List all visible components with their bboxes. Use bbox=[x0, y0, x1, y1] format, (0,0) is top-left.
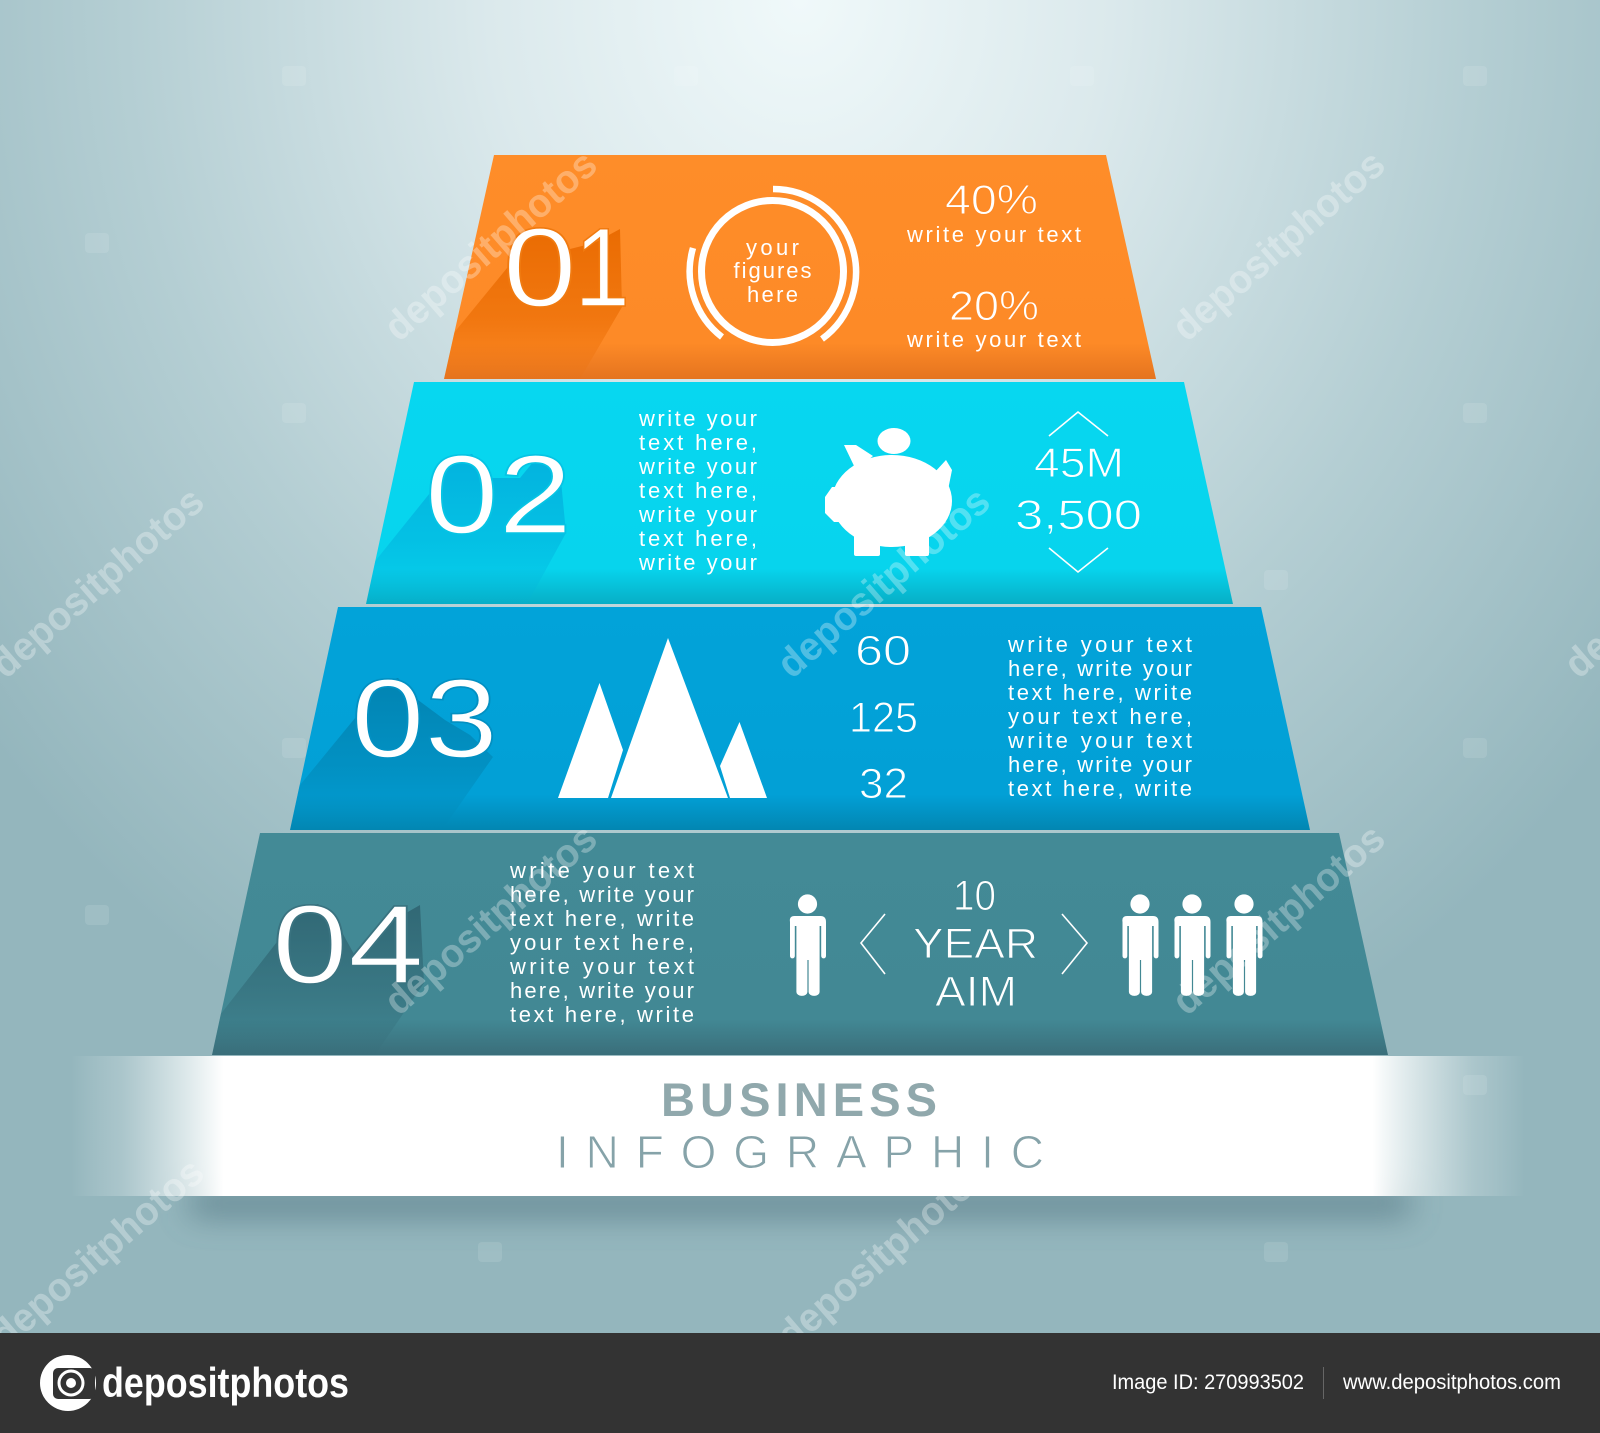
icon: piggy bank bbox=[825, 428, 952, 556]
number 01: 1 bbox=[574, 205, 630, 330]
text block 04: text here, write bbox=[510, 1002, 694, 1027]
footer background bbox=[0, 1333, 1600, 1433]
diagonal depositphotos watermarks: depositphotos bbox=[1164, 142, 1393, 350]
footer bar bbox=[0, 1333, 1600, 1433]
panel 03: blue tier bbox=[290, 607, 1310, 830]
panel 03 long shadow bbox=[294, 678, 493, 808]
footer separator bbox=[1323, 1367, 1324, 1399]
diagonal depositphotos watermarks: depositphotos bbox=[769, 479, 998, 687]
arrow up bbox=[1049, 412, 1108, 436]
text block 04: here, write your bbox=[510, 978, 694, 1003]
text block 02: write your bbox=[638, 550, 757, 575]
panel 03 background bbox=[290, 607, 1310, 830]
heading: infographic: INFOGRAPHIC bbox=[556, 1126, 1044, 1178]
icon: three people bbox=[1122, 894, 1262, 996]
panel 04 background bbox=[212, 833, 1388, 1055]
website url: www.depositphotos.com bbox=[1342, 1371, 1561, 1394]
panel 04: teal tier bbox=[212, 833, 1388, 1055]
value 3,500: 3,500 bbox=[1015, 491, 1142, 538]
band background bbox=[71, 1056, 1525, 1196]
number 01 bbox=[503, 205, 630, 330]
text block 02: write your bbox=[638, 454, 757, 479]
donut caption: figures bbox=[734, 258, 812, 283]
text block 02: write your bbox=[638, 406, 757, 431]
heading: business: BUSINESS bbox=[661, 1073, 937, 1126]
icon: mountains bbox=[558, 638, 767, 798]
value 45M: 45M bbox=[1034, 439, 1124, 486]
donut caption bbox=[734, 235, 812, 307]
stat 40%: 40% bbox=[945, 176, 1038, 223]
panel 02: cyan tier bbox=[366, 382, 1233, 604]
diagonal depositphotos watermarks: depositphotos bbox=[769, 1150, 998, 1358]
text block 02 bbox=[638, 406, 757, 575]
faint camera watermark icons bbox=[85, 66, 1487, 1262]
panel 02 long shadow bbox=[370, 454, 566, 584]
text block 02: text here, bbox=[639, 526, 757, 551]
text block 03: here, write your bbox=[1008, 752, 1192, 777]
label 10 year aim: AIM bbox=[935, 968, 1017, 1016]
number 02: 02 bbox=[425, 432, 572, 557]
label 10 year aim: 10 bbox=[953, 872, 996, 920]
band shadow bbox=[190, 1190, 1410, 1216]
text block 03: text here, write bbox=[1008, 776, 1192, 801]
stat 20%: 20% bbox=[949, 282, 1039, 329]
number 04: 04 bbox=[272, 883, 424, 1007]
icon: single person bbox=[790, 894, 826, 996]
stat 40% caption: write your text bbox=[906, 222, 1081, 247]
text block 03: write your text bbox=[1007, 632, 1192, 657]
logo wordmark: depositphotos bbox=[102, 1359, 349, 1406]
text block 03: text here, write bbox=[1008, 680, 1192, 705]
arrow down bbox=[1049, 548, 1108, 572]
text block 02: write your bbox=[638, 502, 757, 527]
text block 03: your text here, bbox=[1008, 704, 1192, 729]
text block 02: text here, bbox=[639, 430, 757, 455]
panel 01 long shadow bbox=[444, 229, 622, 379]
panel 02 background bbox=[366, 382, 1233, 604]
diagonal depositphotos watermarks: depositphotos bbox=[1164, 816, 1393, 1024]
text block 04: text here, write bbox=[510, 906, 694, 931]
chevron right bbox=[1062, 914, 1087, 974]
donut caption: your bbox=[746, 235, 799, 260]
chevron left bbox=[861, 914, 885, 974]
diagonal depositphotos watermarks: depositphotos bbox=[376, 816, 605, 1024]
label 10 year aim bbox=[913, 872, 1038, 1016]
text block 04: write your text bbox=[509, 954, 694, 979]
text block 04 bbox=[509, 858, 694, 1027]
value 32: 32 bbox=[859, 760, 908, 808]
donut figure bbox=[690, 189, 856, 342]
text block 04: your text here, bbox=[510, 930, 694, 955]
value 60: 60 bbox=[855, 627, 911, 675]
title band bbox=[71, 1056, 1525, 1196]
text block 03: write your text bbox=[1007, 728, 1192, 753]
text block 03 bbox=[1007, 632, 1192, 801]
value 125: 125 bbox=[849, 694, 918, 742]
diagonal depositphotos watermarks: depositphotos bbox=[376, 142, 605, 350]
panel 01 background bbox=[444, 155, 1156, 379]
text block 02: text here, bbox=[639, 478, 757, 503]
logo: camera circle bbox=[40, 1355, 96, 1411]
text block 04: write your text bbox=[509, 858, 694, 883]
number 01: 0 bbox=[503, 205, 576, 330]
image id: Image ID: 270993502 bbox=[1112, 1371, 1304, 1394]
panel 04 long shadow bbox=[219, 904, 424, 1024]
panel 01: orange tier bbox=[444, 155, 1156, 379]
stat 20% caption: write your text bbox=[906, 327, 1081, 352]
text block 03: here, write your bbox=[1008, 656, 1192, 681]
donut caption: here bbox=[747, 282, 798, 307]
number 03: 03 bbox=[351, 656, 498, 781]
label 10 year aim: YEAR bbox=[913, 920, 1038, 968]
text block 04: here, write your bbox=[510, 882, 694, 907]
